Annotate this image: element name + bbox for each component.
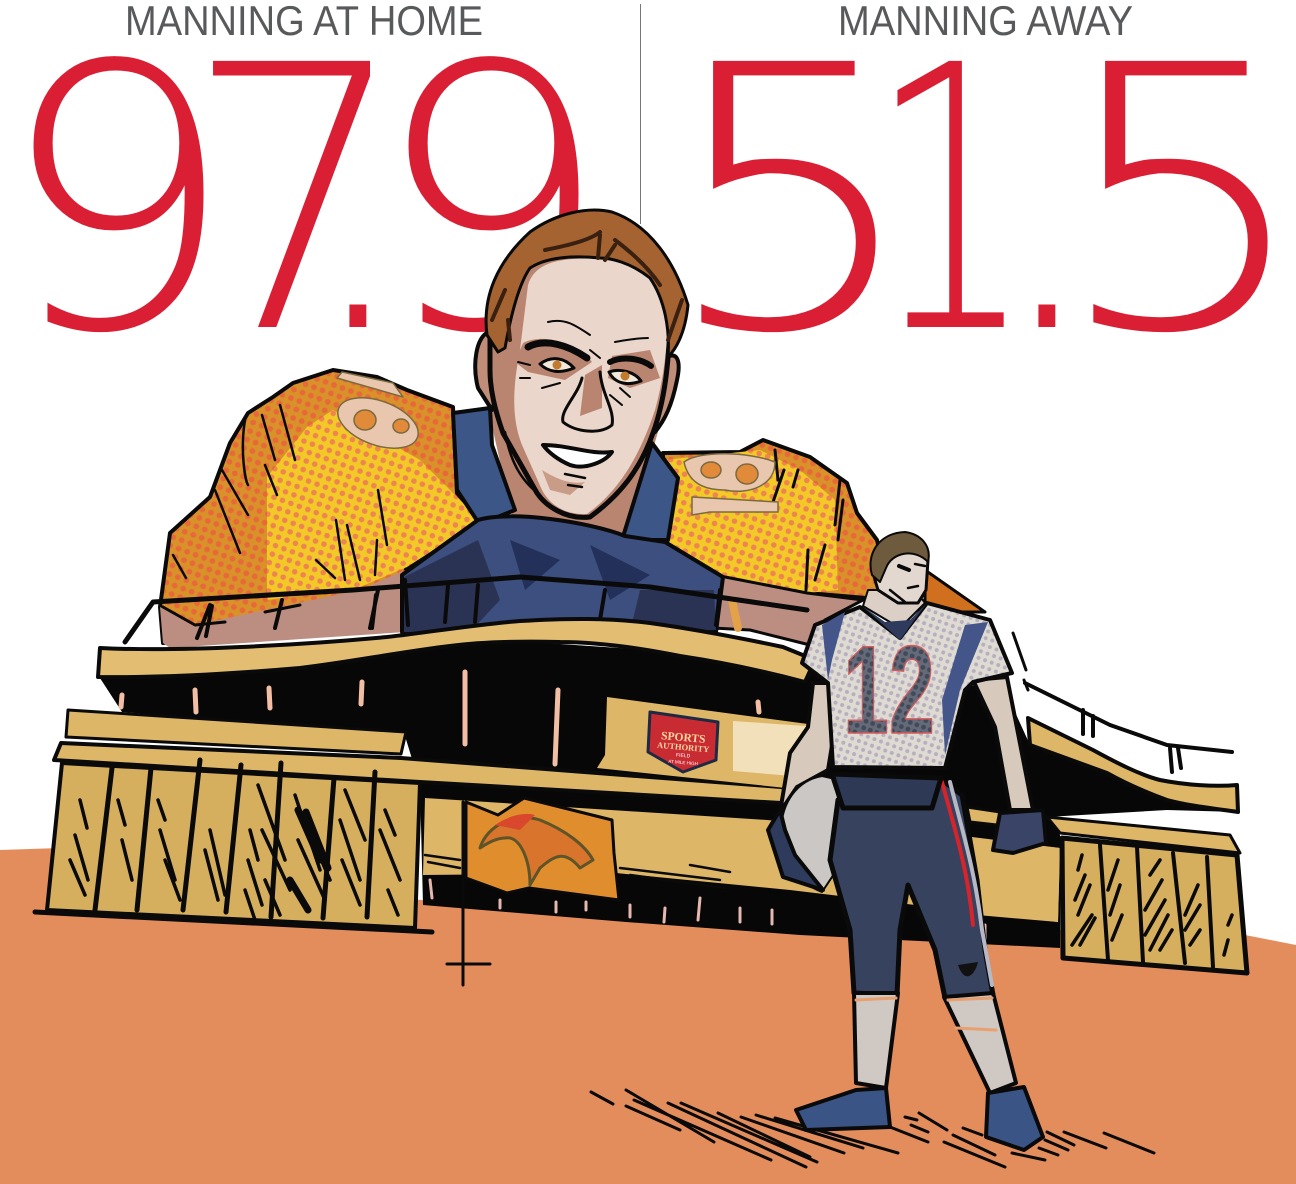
- number: 51.5: [661, 0, 1296, 414]
- badge: Sports Authority Field: SPORTS: [661, 730, 706, 746]
- collar: [862, 604, 926, 640]
- head: [475, 210, 688, 517]
- illustration: stadium: [35, 577, 1247, 985]
- left wing upper band: [66, 710, 406, 754]
- collar left: [453, 408, 515, 522]
- stadium lights: [121, 672, 759, 764]
- ear left: [475, 332, 505, 410]
- helmet: [781, 776, 850, 892]
- jersey: [802, 603, 1012, 768]
- center divider: [640, 4, 641, 224]
- right glove: [993, 810, 1046, 853]
- flag: [466, 798, 619, 900]
- mouth: [543, 445, 612, 467]
- ground: [0, 848, 1296, 1184]
- illustration: Brady: [591, 532, 1154, 1167]
- number: 97.9: .: [304, 0, 412, 414]
- left arm: [780, 683, 835, 812]
- badge: Sports Authority Field: [648, 712, 718, 772]
- left cleat: [796, 1088, 890, 1130]
- neck: [488, 408, 660, 535]
- number: 51.5: 5: [661, 0, 921, 414]
- belt: [832, 774, 941, 808]
- right lower band: [967, 807, 1240, 853]
- upper roof band: [98, 619, 815, 682]
- legs: [830, 780, 993, 998]
- number 18 on shoulders: [331, 372, 778, 515]
- hair: [486, 210, 688, 357]
- badge: Sports Authority Field: AUTHORITY: [657, 740, 710, 754]
- motion strokes: [1013, 633, 1028, 690]
- illustration: giant Manning: [160, 210, 890, 648]
- right roof band: [1028, 718, 1238, 812]
- number: 51.5: 1: [869, 0, 1034, 413]
- chest: [402, 516, 723, 632]
- arms: [160, 570, 863, 648]
- right arm: [973, 677, 1033, 810]
- ear right: [650, 355, 679, 432]
- number: 97.9: [0, 0, 611, 414]
- nose: [563, 372, 612, 431]
- left glove: [768, 810, 823, 890]
- number: 97.9: 7: [184, 0, 409, 413]
- sign panel: [597, 697, 808, 790]
- jersey number 12: 12: [843, 621, 935, 760]
- flag pole: [447, 802, 490, 985]
- face shadow: [490, 251, 669, 517]
- socks: [854, 993, 1016, 1093]
- long horizontal band: [54, 743, 812, 822]
- stadium roof line: [125, 577, 807, 642]
- number: 51.5: .: [993, 0, 1101, 414]
- number: 97.9: 9: [372, 0, 611, 414]
- eyebrows and eyes: [528, 343, 587, 358]
- right cleat: [986, 1087, 1043, 1150]
- badge: Sports Authority Field: FIELD: [676, 752, 691, 760]
- lower wall brush lines: [425, 855, 730, 888]
- right wing wall: [1062, 838, 1247, 973]
- jersey blue panels: [822, 612, 988, 755]
- collar right: [622, 443, 678, 540]
- right shoulder jersey: [663, 440, 890, 600]
- lower wall center: [423, 798, 1060, 922]
- neck and head: [863, 532, 929, 628]
- lower lights: [430, 880, 985, 939]
- left shoulder jersey: [160, 370, 480, 643]
- badge: Sports Authority Field: AT MILE HIGH: [668, 759, 698, 766]
- face light: [514, 258, 668, 514]
- black interior: [98, 640, 1238, 948]
- ground shadow hatching: [591, 1090, 1154, 1167]
- right center wall: [972, 837, 1060, 922]
- right roof upper line: [1025, 683, 1232, 772]
- left wing wall: [35, 760, 432, 932]
- cream box: [733, 721, 806, 777]
- leg stripe: [942, 782, 973, 925]
- orange shoulder behind Brady: [925, 570, 985, 612]
